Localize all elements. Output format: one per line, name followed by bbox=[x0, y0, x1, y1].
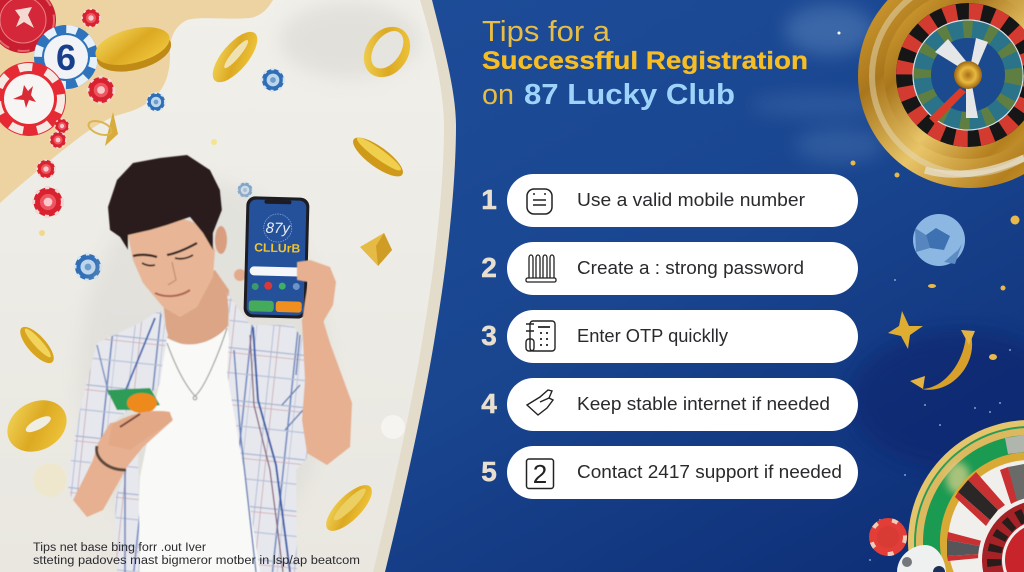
white ball with black patches bbox=[897, 545, 946, 572]
tip 2: 2 bbox=[481, 252, 497, 283]
large phone: CLLUrB bbox=[254, 240, 301, 256]
tip 3: Enter OTP quicklly bbox=[577, 326, 728, 346]
app icons bbox=[252, 281, 300, 291]
ring 2 bbox=[354, 18, 420, 86]
necklace bbox=[167, 328, 227, 400]
gripping fingers bbox=[108, 411, 172, 450]
ring 3 bbox=[348, 131, 408, 183]
small red chips bbox=[34, 9, 114, 216]
chip: red top bbox=[0, 0, 56, 53]
plaid shirt left side bbox=[67, 310, 168, 572]
title: Tips for a bbox=[482, 16, 611, 48]
input field bbox=[250, 266, 303, 277]
raised forearm bbox=[302, 320, 352, 465]
icon: keypad bbox=[526, 321, 555, 351]
chip: large red and white bbox=[0, 62, 66, 136]
title bbox=[482, 16, 808, 111]
grey ring segment bbox=[1005, 435, 1024, 454]
phone logo text: 87y bbox=[265, 220, 292, 237]
left photo panel bbox=[0, 0, 456, 572]
starry specks bbox=[869, 279, 1011, 561]
ring 5 bbox=[0, 390, 76, 462]
silver spokes bbox=[935, 38, 988, 118]
tip 1 bbox=[481, 174, 858, 227]
caption text: Tips net base bing forr .out Iver bbox=[33, 542, 206, 554]
icon: check hand bbox=[527, 390, 553, 415]
tip 3: 3 bbox=[481, 320, 497, 351]
teal and olive wedge ring bbox=[923, 30, 1013, 120]
caption text: stteting padoves mast bigmeror motber in lsp/ap beatcom bbox=[33, 555, 360, 567]
person holding phones bbox=[67, 155, 352, 572]
chip: blue number six: 6 bbox=[56, 37, 76, 78]
inner number ring bbox=[978, 499, 1024, 572]
tan wash bbox=[0, 0, 273, 203]
red pointer bbox=[929, 88, 966, 124]
ring 4 bbox=[15, 322, 59, 368]
chip: blue number six bbox=[34, 25, 98, 89]
blue soccer chip bbox=[913, 214, 965, 266]
gold coins and rings bbox=[0, 18, 420, 538]
tip 3 bbox=[481, 310, 858, 363]
gold hub bbox=[954, 61, 982, 89]
tip 4: Keep stable internet if needed bbox=[577, 394, 830, 414]
tip 1: 1 bbox=[481, 184, 497, 215]
faint balls and sparkles bbox=[33, 139, 405, 497]
tip 4: 4 bbox=[481, 388, 497, 419]
nose and mouth bbox=[155, 262, 190, 296]
ear bbox=[215, 226, 227, 254]
logo ring bbox=[263, 214, 292, 242]
gold curved arrow bbox=[910, 330, 975, 390]
soft shadow bbox=[80, 180, 330, 560]
flat coin bbox=[92, 20, 175, 79]
lower forearm and hand bbox=[73, 413, 173, 517]
ring 6 bbox=[319, 478, 379, 538]
gold star bbox=[888, 311, 923, 349]
glow on ring bbox=[946, 462, 970, 494]
large phone bbox=[243, 196, 310, 319]
green button bbox=[249, 300, 274, 312]
tip 1: Use a valid mobile number bbox=[577, 190, 805, 210]
finger crease bbox=[120, 414, 140, 427]
wheel wedges bbox=[947, 464, 1024, 561]
plaid shirt right side bbox=[227, 293, 308, 572]
tip 5: Contact 2417 support if needed bbox=[577, 462, 842, 482]
top roulette wheel bbox=[858, 0, 1024, 188]
hair bbox=[108, 155, 222, 250]
white t-shirt bbox=[136, 326, 262, 572]
neck bbox=[163, 270, 229, 350]
icon: password bars bbox=[526, 255, 556, 282]
icon: number two box: 2 bbox=[533, 459, 547, 489]
tip 2: Create a : strong password bbox=[577, 258, 804, 278]
caption text bbox=[33, 542, 360, 567]
title: 87 Lucky Club bbox=[524, 79, 735, 111]
face bbox=[128, 215, 215, 317]
ring 1 bbox=[205, 25, 265, 89]
thumb behind phone bbox=[234, 269, 246, 281]
gold sparkle dots bbox=[838, 32, 1020, 360]
bracelet bbox=[97, 446, 126, 470]
title: on bbox=[482, 79, 514, 111]
icon: number two box bbox=[526, 459, 554, 489]
tip 5: 5 bbox=[481, 456, 497, 487]
gold bow bbox=[87, 112, 118, 146]
small blue chips bbox=[75, 69, 284, 280]
hand gripping large phone bbox=[297, 260, 336, 322]
casino chips cluster bbox=[0, 0, 284, 280]
small phone in hand bbox=[107, 388, 160, 413]
red chip bottom bbox=[869, 518, 907, 556]
title: Successfful Registration bbox=[482, 47, 808, 75]
tip 4 bbox=[481, 378, 858, 431]
green ring bbox=[923, 435, 1024, 572]
brows and eyes bbox=[133, 243, 197, 266]
icon: mobile form bbox=[527, 189, 552, 214]
orange button bbox=[276, 301, 302, 313]
gold pyramid bbox=[360, 233, 392, 266]
tip 5 bbox=[481, 446, 858, 499]
number ring bbox=[904, 12, 1024, 138]
tip 2 bbox=[481, 242, 858, 295]
bottom roulette wheel bbox=[908, 420, 1024, 572]
